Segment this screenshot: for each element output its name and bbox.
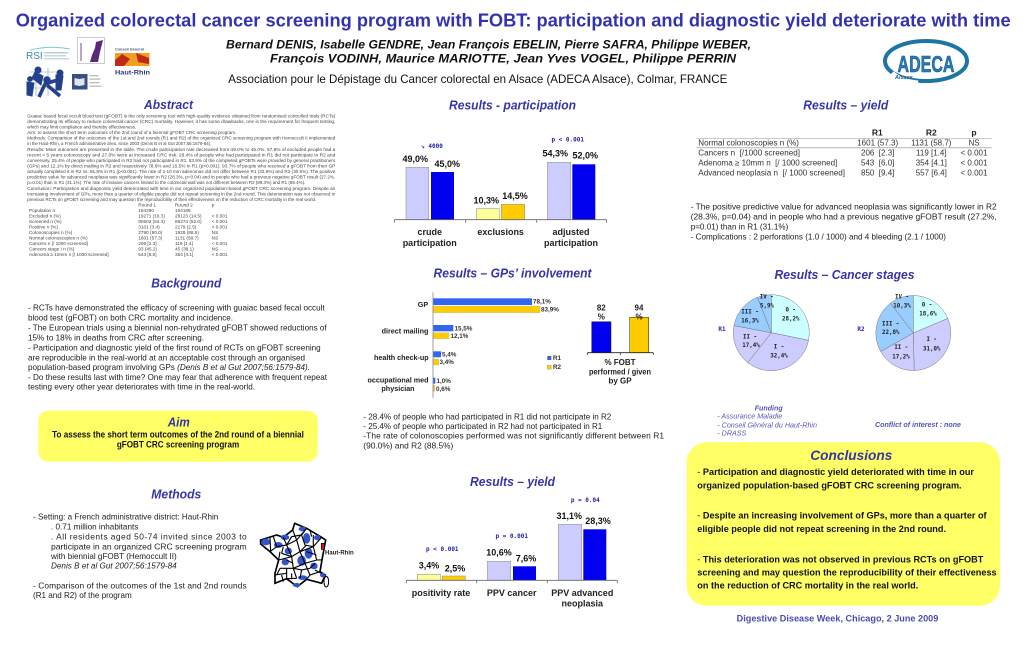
abstract table: 119 [1.4]	[175, 241, 193, 246]
affiliation: Association pour le Dépistage du Cancer colorectal en Alsace (ADECA Alsace), Colmar, FRANCE	[228, 72, 727, 86]
abstract table: 19271 (10.3)	[138, 213, 165, 218]
abstract table: Adenoma ≥ 10mm n [/ 1000 screened]	[29, 252, 109, 257]
heading: cancer stages: Results – Cancer stages	[774, 268, 915, 282]
table: yield: NS	[968, 139, 980, 148]
yield text: - Complications : 2 perforations (1.0 / 1000) and 4 bleeding (2.1 / 1000)	[691, 232, 946, 242]
abstract text: recent < 5 years colonoscopy and 27.0% were at increased CRC risk. 28.4% of people who had participated in R1 did not participate in R2 and	[27, 152, 336, 157]
abstract table: 1601 (57.3)	[138, 236, 163, 241]
bar chart: participation: 45,0%	[435, 159, 460, 169]
bar chart: yield: 2,5%	[445, 563, 465, 573]
abstract table: 184290	[138, 208, 154, 213]
abstract table: Round 2	[175, 203, 193, 208]
abstract table: 45 (38.1)	[175, 246, 194, 251]
panel: results cancer stages	[718, 268, 951, 371]
abstract text: p=0.01) than in R1 (31.1%). The rate of invasive cancers limited to the colorectal wall was not different between R2 (89.3%) and R1 (89.4%).	[27, 180, 305, 185]
map: participating departments	[261, 527, 325, 587]
pie chart: R1: 16,3%	[741, 318, 759, 324]
panel: abstract	[27, 98, 336, 257]
panel: results GP involvement	[363, 267, 664, 451]
yield text: (28.3%, p=0.04) and in people who had a previous negative gFOBT result (27.2%,	[691, 212, 997, 222]
bar chart: participation: exclusions	[477, 227, 524, 237]
partner logos	[26, 38, 150, 97]
panel: results participation	[394, 99, 607, 248]
abstract table: < 0.001	[212, 241, 228, 246]
bar chart: FOBT performed given by GP: 94	[635, 304, 644, 313]
abstract table: 1131 (58.7)	[175, 236, 199, 241]
abstract table: 93 (45.2)	[138, 246, 158, 251]
table: yield: R1	[872, 128, 883, 138]
bar chart: GP involvement: GP	[418, 300, 428, 309]
abstract table: NS	[212, 230, 218, 235]
table: yield: 1131 (58.7)	[911, 139, 952, 148]
abstract table: Population n	[29, 208, 55, 213]
pie chart: R2: 10,3%	[893, 303, 911, 309]
pie chart: R2: III -	[882, 321, 899, 327]
pie chart: R1: R1	[718, 326, 726, 333]
conclusions text: organized population-based gFOBT CRC screening program.	[697, 480, 962, 490]
pie chart: R1: 5,9%	[760, 304, 774, 310]
bar chart: participation	[394, 137, 607, 248]
background text: are reproducible in the real-world at an acceptable cost through an organised	[28, 352, 305, 362]
pie chart: R2: R2	[857, 326, 865, 333]
abstract table: < 0.001	[212, 213, 228, 218]
conclusions text: screening and may question the reproducibility of their effectiveness	[697, 568, 997, 578]
pie chart: R1: II -	[743, 334, 757, 340]
bar chart: yield: 7,6%	[516, 553, 536, 563]
heading: results yield: Results – yield	[470, 475, 555, 489]
background text	[28, 303, 328, 391]
GP text: - 28.4% of people who had participated in R1 did not participate in R2	[363, 411, 612, 421]
abstract text: Aim: to assess the short term outcomes of the 2nd round of a biennial gFOBT CRC screening program.	[27, 130, 236, 135]
abstract table: < 0.001	[212, 225, 228, 230]
logo: Conseil General Haut-Rhin: Haut-Rhin	[115, 70, 150, 76]
pie chart: R1: III -	[741, 309, 759, 315]
abstract table: 3101 (3.4)	[138, 225, 160, 230]
bar chart: GP involvement: 12,1%	[450, 333, 469, 340]
logo: ADECA: Alsace	[894, 75, 913, 81]
background text: - Participation and diagnostic yield of the first round of RCTs on gFOBT screening	[28, 342, 321, 352]
abstract text: conversely, 25.4% of people who participated in R2 had not participated in R1. 83.9% of the completed gFOBTs were provided by general practitioners	[27, 158, 336, 163]
background text: - RCTs have demonstrated the efficacy of screening with guaiac based fecal occult	[28, 303, 325, 313]
panel: results yield table	[691, 99, 997, 242]
funding: - Assurance Maladie	[717, 412, 782, 421]
heading: methods: Methods	[151, 487, 201, 501]
abstract table: Excluded n (%)	[29, 213, 61, 218]
pie chart: R2: 22,8%	[882, 330, 900, 336]
bar chart: GP involvement: 78,1%	[533, 298, 551, 306]
pie chart: R1: 0 -	[785, 307, 796, 313]
pie chart: R1: 17,4%	[742, 343, 760, 349]
funding: Funding	[755, 404, 783, 413]
pie chart: R1: IV -	[760, 295, 774, 301]
heading: GP involvement: Results – GPs’ involvement	[434, 267, 592, 281]
bar chart: yield: 31,1%	[557, 511, 582, 521]
authors	[226, 40, 751, 66]
abstract table: < 0.001	[212, 219, 228, 224]
yield text: - The positive predictive value for advanced neoplasia was significantly lower in R2	[691, 202, 997, 212]
bar chart: GP involvement: 0,6%	[436, 386, 451, 393]
bar chart: FOBT performed given by GP: 82	[597, 304, 606, 313]
map: Haut-Rhin	[321, 543, 324, 549]
bar chart: participation: adjusted	[552, 227, 590, 237]
bar chart: participation: 54,3%	[543, 149, 568, 159]
table: yield: Normal colonoscopies n (%)	[698, 139, 799, 148]
abstract table: Cancers stage I n (%)	[29, 246, 75, 251]
conflict of interest: Conflict of interest : none	[875, 420, 961, 429]
funding	[717, 404, 817, 438]
heading: background: Background	[151, 276, 222, 290]
panel: aim	[38, 411, 318, 462]
bar chart: GP involvement: 5,4%	[442, 352, 457, 358]
pie chart: R1: 32,4%	[770, 353, 788, 359]
pie chart: R2: IV -	[895, 294, 909, 300]
bar chart: FOBT performed given by GP: %	[635, 313, 643, 322]
methods text	[33, 512, 247, 600]
pie chart: R2: 31,0%	[923, 346, 941, 352]
pie chart: R2: II -	[894, 345, 908, 351]
pie chart: R2: 18,6%	[919, 311, 937, 317]
background text: testing every other year deteriorates with time in the real-world.	[28, 381, 255, 391]
conclusions text	[697, 467, 997, 591]
bar chart: GP involvement	[367, 292, 562, 398]
bar chart: GP involvement: 15,5%	[454, 326, 473, 332]
abstract text: Conclusion: Participation and diagnostic yield deteriorated with time in our organized population-based gFOBT CRC screening program. Despite an	[27, 186, 336, 191]
map label: Haut-Rhin	[325, 551, 354, 557]
background text: 15% to 18% in deaths from CRC after screening.	[28, 333, 204, 343]
table: yield: 850 [9.4]	[861, 168, 894, 177]
panel: results yield chart	[406, 475, 617, 609]
abstract text: previous RCTs on gFOBT screening and may question the reproducibility of their effectiveness on the reduction of CRC mortality in the real world.	[27, 197, 316, 202]
map: France departments	[261, 523, 354, 587]
abstract table: 354 [4.1]	[175, 252, 193, 257]
abstract table	[29, 203, 228, 257]
table: yield: 119 [1.4]	[916, 149, 947, 158]
table: yield: 543 [6.0]	[861, 159, 894, 168]
aim text: To assess the short term outcomes of the 2nd round of a biennial	[52, 429, 304, 439]
bar chart: yield: 3,4%	[419, 561, 439, 571]
abstract text: in the Haut-Rhin, a French administrative area, since 2003 (Denis B et al Gut 2007;56:1579-84).	[27, 141, 211, 146]
bar chart: participation: 52,0%	[573, 151, 598, 161]
pie chart: R2	[857, 294, 951, 371]
abstract text: Methods: Comparison of the outcomes of the 1st and 2nd rounds (R1 and R2) of the organized CRC screening program with Hemoccult II implemented	[27, 136, 336, 141]
conclusions text: - Despite an increasing involvement of GPs, more than a quarter of	[697, 511, 988, 521]
legend: R2	[553, 364, 562, 371]
bar chart: yield: PPV advanced	[551, 588, 613, 598]
bar chart: yield: 28,3%	[585, 516, 611, 526]
funding: - Conseil Général du Haut-Rhin	[717, 420, 817, 429]
pie chart: R1: I -	[774, 344, 784, 350]
bar chart: FOBT performed given by GP	[587, 304, 653, 385]
abstract table: 2179 (2.5)	[175, 225, 197, 230]
bar chart: yield: p = 0.001	[495, 533, 528, 540]
conclusions text: - This deterioration was not observed in previous RCTs on gFOBT	[697, 554, 984, 564]
abstract table: Colonoscopies n (%)	[29, 230, 73, 235]
background text: - Do these results last with time? One may fear that adherence with frequent repeat	[28, 372, 328, 382]
methods text: (R1 and R2) of the program	[33, 590, 132, 600]
table: yield: 354 [4.1]	[916, 159, 947, 168]
methods text: - Comparison of the outcomes of the 1st and 2nd rounds	[33, 580, 247, 590]
heading: abstract: Abstract	[143, 98, 194, 112]
bar chart: GP involvement: 3,4%	[440, 359, 454, 366]
bar chart: GP involvement: health check-up	[374, 353, 429, 362]
pie chart: R1	[718, 295, 809, 371]
heading: results participation: Results - participation	[449, 99, 576, 113]
legend	[547, 355, 562, 371]
table: yield: 1601 (57.3)	[857, 139, 898, 148]
conclusions text: on the reduction of CRC mortality in the real world.	[697, 581, 918, 591]
GP text: - 25.4% of people who participated in R2 had not participated in R1	[363, 421, 603, 431]
abstract table: 543 [6.0]	[138, 252, 157, 257]
logo: ADECA: ADECA	[898, 51, 954, 77]
bar chart: participation: crude	[417, 227, 442, 237]
abstract text	[27, 113, 336, 202]
table: yield: Cancers n [/1000 screened]	[698, 149, 800, 158]
abstract text: (GPs) and 12.1% by direct mailing in R2 and respectively 78.6% and 15.5% in R1 (p<0.001). 93.7% of people who received a gFOBT from their GP	[27, 164, 335, 168]
panel: conclusions	[687, 442, 1000, 606]
bar chart: yield: neoplasia	[562, 599, 604, 609]
conclusions text: eligible people did not repeat screening in the 2nd round.	[697, 524, 946, 534]
abstract table: Normal colonoscopies n (%)	[29, 236, 88, 241]
bar chart: yield: p = 0.04	[571, 497, 600, 504]
methods text: with biennial gFOBT (Hemoccult II)	[50, 551, 177, 561]
methods text: Denis B et al Gut 2007;56:1579-84	[51, 561, 177, 571]
panel: background	[28, 276, 328, 391]
heading: results yield: Results – yield	[803, 99, 889, 113]
heading: conclusions: Conclusions	[810, 447, 893, 463]
GP text: -The rate of colonoscopies performed was not significantly different between R1	[363, 431, 664, 441]
table: yield	[697, 128, 992, 177]
background text: - The European trials using a biennial non-rehydrated gFOBT showed reductions of	[28, 323, 327, 333]
logo: Conseil General Haut-Rhin	[115, 48, 150, 76]
table: yield: 206 [2.3]	[861, 149, 894, 158]
logo: figures	[27, 67, 63, 97]
abstract text: increasing involvement of GPs, more than a quarter of eligible people did not repeat screening in the 2nd round. This deterioration was not observed in	[27, 191, 336, 196]
table: yield: Advanced neoplasia n [/ 1000 screened]	[698, 168, 845, 177]
bar chart: participation: 10,3%	[474, 196, 499, 206]
authors: Bernard DENIS, Isabelle GENDRE, Jean François EBELIN, Pierre SAFRA, Philippe WEBER,	[226, 40, 751, 52]
table: yield: Adenoma ≥ 10mm n [/ 1000 screened]	[698, 159, 837, 168]
abstract table: 206 [2.3]	[138, 241, 157, 246]
bar chart: participation: p < 0.001	[551, 137, 584, 144]
abstract table: Screened n (%)	[29, 219, 62, 224]
map: Corsica	[324, 576, 329, 587]
table: yield: < 0.001	[961, 168, 988, 177]
methods text: - Setting: a French administrative district: Haut-Rhin	[33, 512, 219, 522]
abstract table: 28123 (14.5)	[175, 213, 202, 218]
pie chart: R2: 17,2%	[892, 354, 910, 360]
table: yield: R2	[926, 128, 937, 138]
abstract table: NS	[212, 246, 218, 251]
heading: aim: Aim	[167, 416, 190, 430]
pie chart: R2: I -	[926, 337, 937, 343]
table: yield: 557 [6.4]	[916, 168, 947, 177]
yield text	[691, 202, 997, 242]
bar chart: FOBT performed given by GP: performed / given	[589, 367, 651, 376]
bar chart: participation: 49,0%	[403, 154, 428, 164]
bar chart: participation: 14,5%	[502, 191, 528, 201]
abstract table: p	[212, 203, 215, 208]
methods text: . 0.71 million inhabitants	[51, 521, 138, 531]
background text: blood test (gFOBT) on both CRC mortality and incidence.	[28, 313, 233, 323]
table: yield: < 0.001	[961, 159, 988, 168]
abstract table: 86274 (52.0)	[175, 219, 202, 224]
methods text: . All residents aged 50-74 invited since 2003 to	[51, 531, 247, 541]
footer: meeting: Digestive Disease Week, Chicago, 2 June 2009	[737, 614, 938, 624]
funding: - DRASS	[717, 429, 746, 438]
pie chart: R2: 0 -	[922, 302, 932, 308]
abstract text: predictive value for advanced neoplasia was significantly lower in R2 (28.3%, p=0.04) and in people who had a previous negative gFOBT result (27.2%,	[27, 175, 335, 180]
bar chart: GP involvement: physician	[381, 384, 415, 393]
table: yield: < 0.001	[961, 149, 988, 158]
bar chart: participation: participation	[403, 238, 457, 248]
bar chart: yield: 10,6%	[486, 548, 512, 558]
pie chart: R1: 28,2%	[782, 316, 800, 322]
bar chart: participation: ↘ 4000	[421, 143, 443, 150]
logo: RSI: RSI	[26, 51, 43, 62]
abstract text: Guaiac based fecal occult blood test (gFOBT) is the only screening tool with high-quality evidence obtained from randomised controlled trials (RCTs)	[27, 113, 336, 118]
logo: ADECA	[885, 41, 967, 83]
conclusions text: - Participation and diagnostic yield deteriorated with time in our	[697, 467, 974, 477]
bar chart: participation: participation	[544, 238, 598, 248]
bar chart: yield: positivity rate	[412, 588, 470, 598]
yield text: p=0.01) than in R1 (31.1%)	[691, 222, 789, 232]
abstract table: NS	[212, 236, 218, 241]
logo: regional map	[78, 38, 104, 64]
authors: François VODINH, Maurice MARIOTTE, Jean Yves VOGEL, Philippe PERRIN	[270, 54, 737, 66]
abstract text: which may limit compliance and thereby effectiveness.	[27, 124, 136, 130]
aim text	[52, 429, 304, 449]
logo: book	[72, 74, 102, 90]
bar chart: yield	[406, 497, 617, 609]
title: Organized colorectal cancer screening program with FOBT: participation and diagnostic yield deteriorate with time	[16, 10, 1011, 31]
bar chart: GP involvement: 83,9%	[541, 306, 559, 314]
abstract table: Cancers n [/ 1000 screened]	[29, 241, 88, 246]
abstract table: Round 1	[138, 203, 156, 208]
bar chart: FOBT performed given by GP: by GP	[608, 376, 632, 385]
background text: population-based program involving GPs (Denis B et al Gut 2007;56:1579-84).	[28, 362, 310, 372]
abstract table: 194186	[175, 208, 191, 213]
bar chart: FOBT performed given by GP: % FOBT	[604, 358, 636, 367]
abstract table: < 0.001	[212, 252, 228, 257]
bar chart: yield: PPV cancer	[487, 588, 537, 598]
bar chart: GP involvement: 1,0%	[436, 378, 451, 385]
bar chart: GP involvement: direct mailing	[382, 327, 428, 336]
logo: Conseil General Haut-Rhin: Conseil Général	[115, 48, 144, 52]
abstract table: 2790 (90.0)	[138, 230, 163, 235]
abstract table: Positive n (%)	[29, 225, 58, 230]
aim text: gFOBT CRC screening program	[117, 439, 239, 449]
bar chart: yield: p < 0.001	[426, 546, 459, 553]
bar chart: GP involvement: occupational med	[367, 375, 429, 384]
panel: methods	[33, 487, 354, 600]
abstract table: 1928 (88.5)	[175, 230, 199, 235]
abstract text: actually completed it in R2 vs. 81.8% in R1 (p<0.001). The rate of ≥ 10 mm adenomas did not differ between R1 (32.9%) and R2 (30.5%). The positive	[27, 169, 336, 174]
abstract table: 90502 (54.3)	[138, 219, 165, 224]
abstract text: Results: Main outcomes are presented in the table. The crude participation rate decreased from 49.0% to 45.0%. 57.8% of excluded people had a	[27, 147, 336, 152]
table: yield: p	[971, 128, 977, 138]
methods text: participate in an organized CRC screening program	[51, 541, 247, 551]
GP text: (90.0%) and R2 (88.5%)	[363, 441, 454, 451]
abstract text: demonstrating its efficacy to reduce colorectal cancer (CRC) mortality. However, it has some drawbacks, one is the requirement for frequent testing,	[27, 119, 335, 124]
GP text	[363, 411, 664, 451]
legend: R1	[553, 355, 562, 362]
bar chart: FOBT performed given by GP: %	[598, 313, 605, 322]
